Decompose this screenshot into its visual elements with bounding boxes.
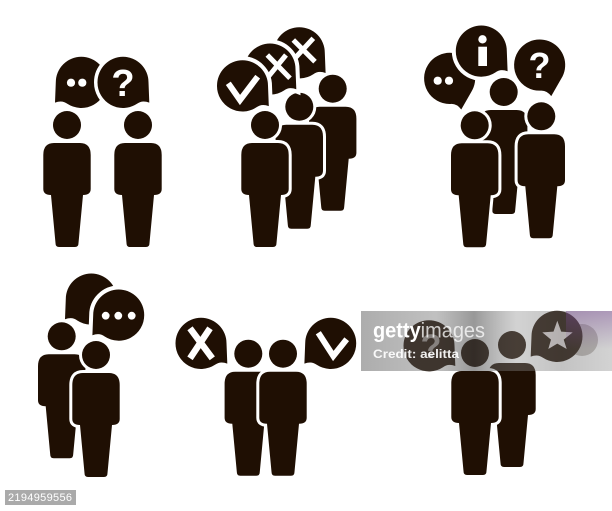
person back [488, 331, 536, 467]
bubble: back [65, 274, 117, 325]
person middle [480, 78, 527, 214]
bubble: question mark: ? [111, 63, 135, 105]
person right [259, 340, 307, 476]
bubble: question mark [97, 57, 149, 108]
bubble: info [456, 26, 508, 77]
group: three people in a row, check and cross bubbles [217, 27, 356, 247]
group: three people, chat, info and question bubbles [414, 26, 576, 247]
bubble: check [304, 318, 356, 369]
group: two people, chat and question bubbles [43, 57, 162, 247]
person left [43, 111, 91, 247]
group: two people, question and star bubbles [403, 311, 598, 475]
group: two people, cross and check bubbles [175, 318, 356, 476]
person left [451, 111, 498, 247]
person front [241, 111, 289, 247]
person middle [276, 93, 323, 229]
bubble: question mark [403, 320, 455, 371]
bubble: middle cross [244, 44, 296, 95]
person back [309, 75, 356, 211]
image id tag: 2194959556 [8, 492, 72, 504]
bubble: back cross [274, 27, 326, 78]
person right [518, 102, 565, 238]
bubble: check mark [217, 60, 269, 111]
person front [451, 339, 499, 475]
person back [38, 322, 85, 458]
bubble: star [531, 311, 598, 362]
bubble: question mark: ? [421, 328, 441, 366]
watermark credit: Credit: aelitta [373, 347, 459, 361]
person right [114, 111, 162, 247]
bubble: dots [414, 43, 486, 114]
bubble: cross [175, 318, 227, 369]
watermark logo: gettyimages [373, 320, 485, 342]
person left [225, 340, 272, 476]
bubble: question mark [504, 30, 576, 101]
bubble: question mark: ? [528, 45, 550, 86]
bubble: dots [55, 57, 107, 108]
watermark band [361, 311, 612, 371]
group: two people, chat bubbles [38, 274, 144, 477]
bubble: three dots [92, 290, 144, 341]
person front [72, 341, 120, 477]
